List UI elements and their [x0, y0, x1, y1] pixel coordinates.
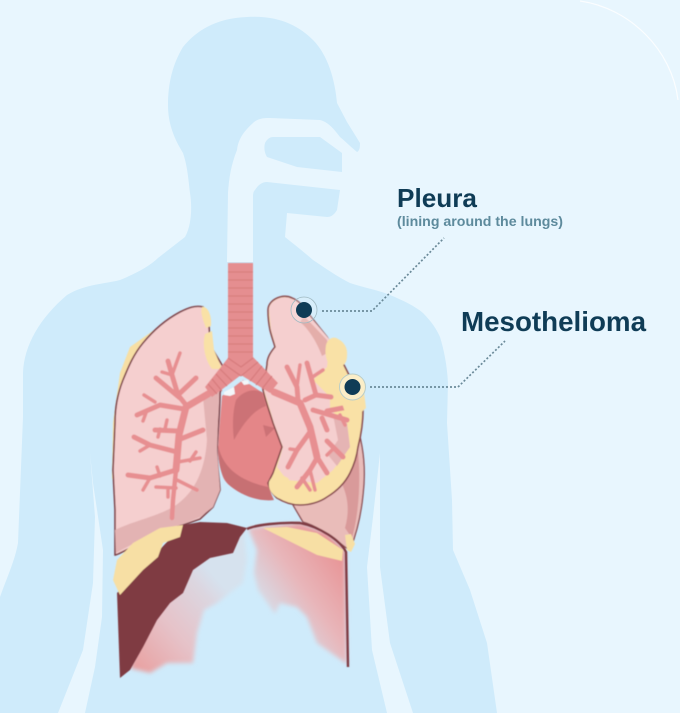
left lower organ gradient	[130, 530, 247, 673]
right yellow	[263, 527, 343, 561]
right lung pink area	[264, 297, 350, 483]
upper blob	[325, 338, 347, 367]
right lung outline	[263, 296, 363, 505]
small yellow blob	[345, 534, 355, 552]
right lower organ gradient	[248, 523, 347, 664]
left yellow	[113, 525, 183, 595]
cartilage rings	[208, 272, 272, 394]
heart body	[218, 380, 282, 500]
left lung body	[113, 306, 225, 555]
heart	[218, 380, 282, 500]
label: mesothelioma: Mesothelioma	[461, 306, 647, 337]
halo	[340, 374, 366, 400]
right lung	[263, 296, 366, 505]
head and torso	[0, 17, 497, 713]
trachea	[205, 263, 278, 397]
pleural thickening blobs	[269, 338, 366, 502]
right arm gap	[367, 453, 413, 713]
label: pleura: Pleura	[397, 183, 478, 213]
mesothelioma marker	[340, 374, 366, 400]
heart lower shadow	[218, 445, 274, 500]
dark liver	[117, 522, 247, 678]
pleura leader line	[322, 238, 444, 311]
left lung yellow edge	[201, 307, 222, 369]
right bronchial tree	[274, 363, 348, 490]
right lung upper shadow	[300, 316, 329, 356]
left bronchial tree	[128, 353, 208, 518]
upper mouth block	[264, 137, 342, 172]
pleura marker	[291, 297, 317, 323]
body silhouette	[0, 17, 497, 713]
label: lining around the lungs: (lining around the lungs)	[397, 214, 563, 229]
left arm gap	[58, 453, 103, 713]
organs	[112, 263, 366, 678]
trachea and bronchi shape	[205, 263, 278, 397]
heart vessel	[233, 390, 275, 440]
mesothelioma leader line	[370, 341, 505, 387]
lower blob	[269, 475, 296, 502]
white carina highlights	[224, 380, 249, 396]
left lung	[112, 306, 225, 555]
mesothelioma blob	[340, 378, 366, 417]
dot	[344, 379, 360, 395]
left lung yellow pleura	[112, 318, 170, 480]
halo	[291, 297, 317, 323]
liver and diaphragm	[113, 522, 355, 678]
dot	[296, 302, 312, 318]
left lung shadow	[115, 392, 220, 553]
right lobe shadow	[340, 445, 359, 538]
right lower lung lobe	[293, 420, 364, 550]
right dark edge	[247, 523, 348, 667]
right lung inner shadow	[328, 415, 350, 466]
rounded corner line	[580, 1, 678, 100]
